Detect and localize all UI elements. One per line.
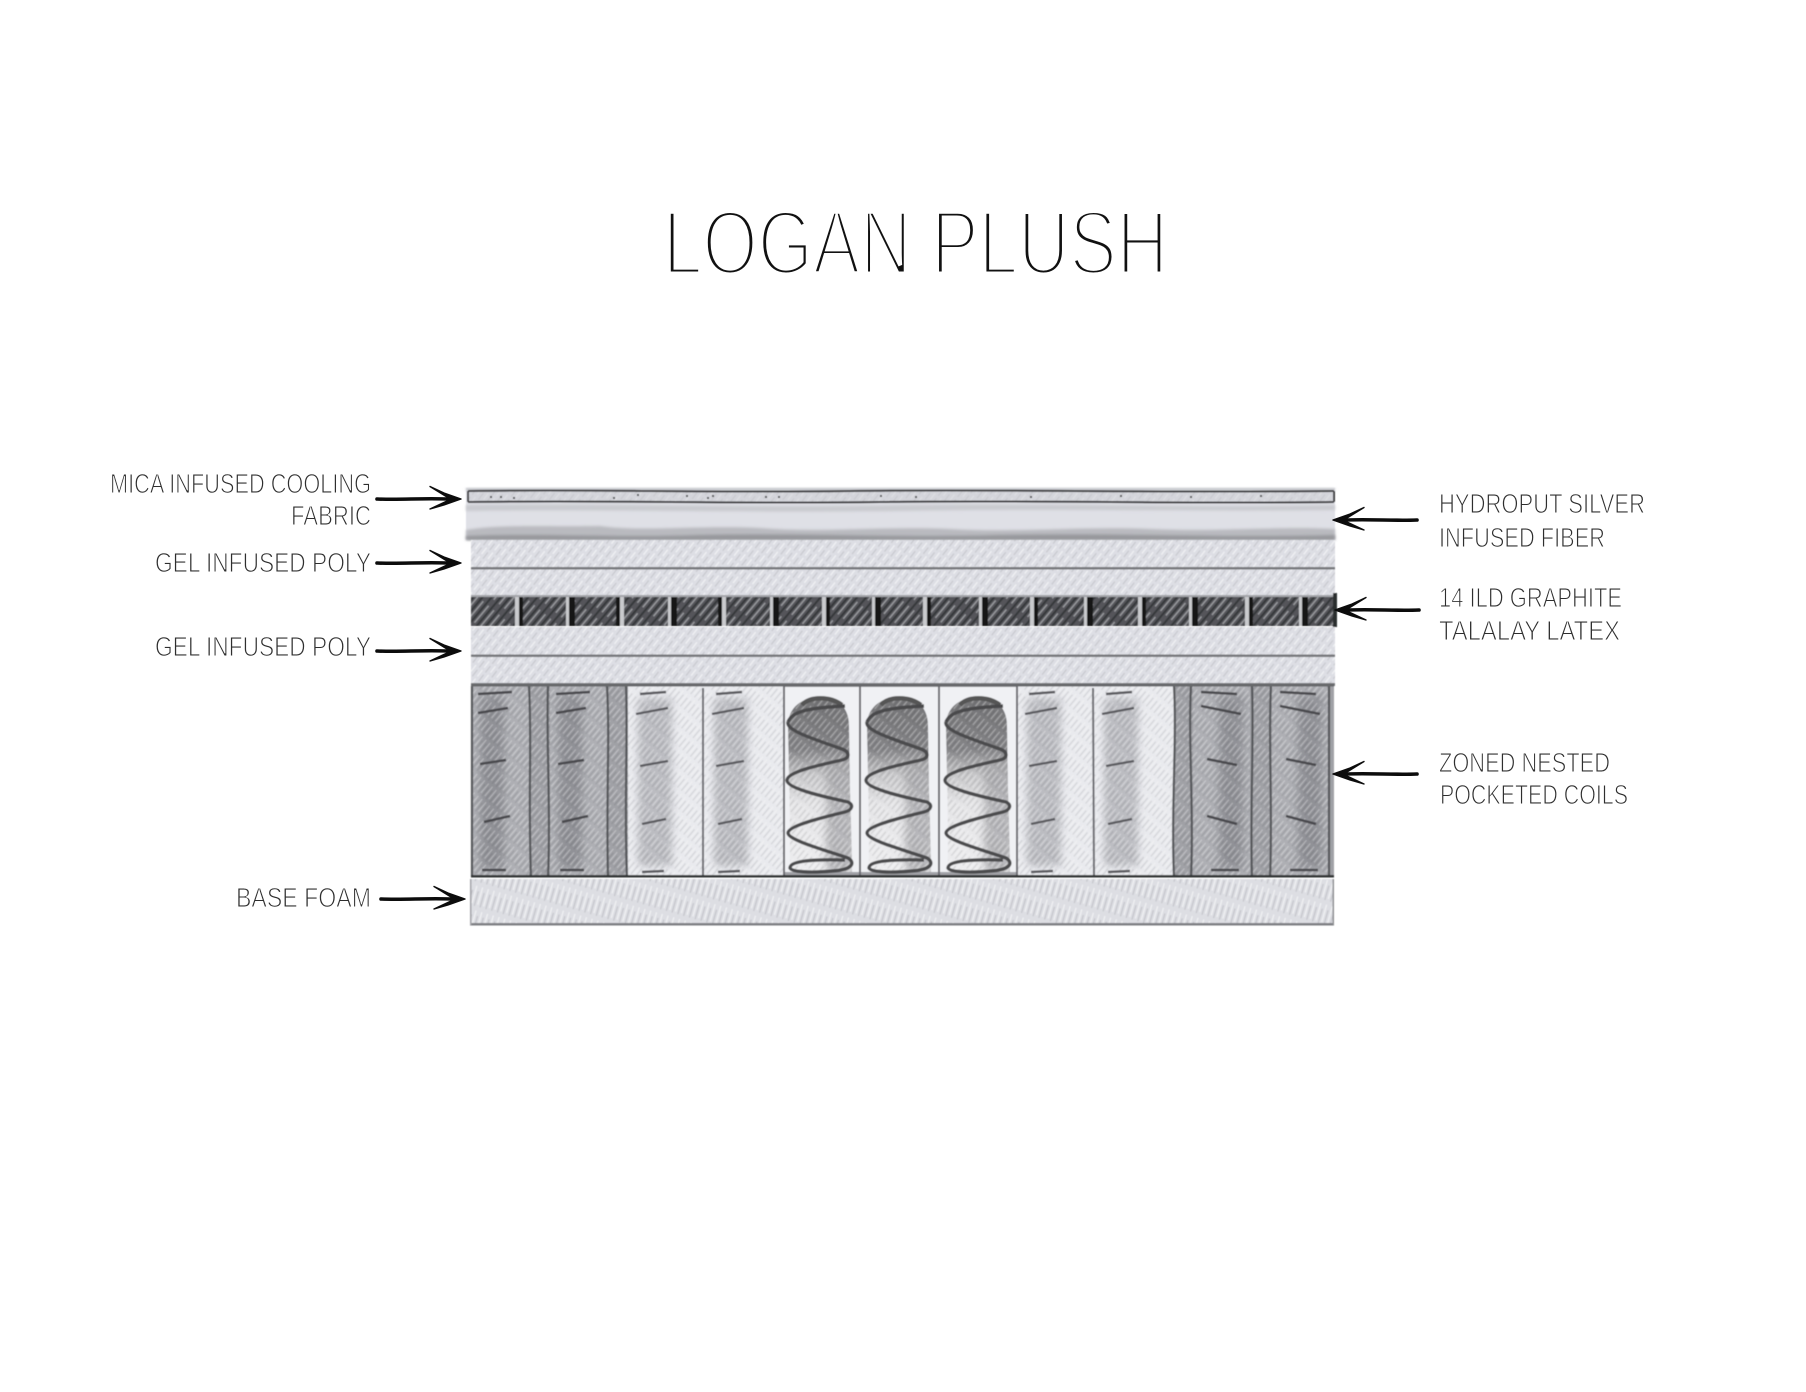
layer: gel infused poly foam pair upper (471, 540, 1335, 597)
callout: mica infused cooling fabric: MICA INFUSED COOLING (110, 468, 371, 499)
callout: hydroput silver infused fiber (1333, 488, 1645, 553)
gutter hatching: firm zones (528, 686, 1272, 877)
spring coil 1 (780, 687, 863, 875)
layer: zoned nested pocketed coils (471, 684, 1334, 878)
callout: 14 ILD graphite talalay latex: TALALAY LATEX (1439, 615, 1620, 646)
layer: gel infused poly foam pair lower (471, 627, 1335, 686)
spring coil 2 (859, 687, 942, 875)
coil: medium right 1 (1017, 686, 1097, 877)
callout: hydroput silver infused fiber: HYDROPUT SILVER (1439, 488, 1645, 519)
coil: medium left 2 (704, 686, 784, 877)
coil: firm right 1 (1193, 686, 1250, 877)
callout: mica infused cooling fabric (110, 468, 461, 531)
coil: firm right 2 (1272, 686, 1329, 877)
callout: 14 ILD graphite talalay latex (1335, 582, 1622, 646)
mattress cross-section (466, 488, 1337, 926)
callout: zoned nested pocketed coils: ZONED NESTED (1439, 747, 1610, 778)
callout: base foam: BASE FOAM (236, 882, 371, 913)
callout: zoned nested pocketed coils (1333, 747, 1628, 810)
callout: 14 ILD graphite talalay latex: 14 ILD GRAPHITE (1439, 582, 1622, 613)
callout: gel infused poly lower: GEL INFUSED POLY (155, 631, 371, 662)
callout: gel infused poly upper: GEL INFUSED POLY (155, 547, 371, 578)
coil: firm left 2 (550, 686, 607, 877)
callout: mica infused cooling fabric: FABRIC (291, 500, 371, 531)
layer: 14 ILD graphite talalay latex (471, 593, 1337, 627)
coil: medium left 1 (628, 686, 708, 877)
callout: zoned nested pocketed coils: POCKETED COILS (1440, 779, 1628, 810)
coil: medium right 2 (1094, 686, 1174, 877)
spring coil 3 (938, 687, 1021, 875)
layer: hydroput silver infused fiber (466, 488, 1335, 540)
layer: mica infused cooling fabric (466, 488, 1335, 503)
layer: base foam (470, 879, 1334, 926)
coil: firm left 1 (472, 686, 529, 877)
title: LOGAN PLUSH (663, 193, 1168, 294)
callout: hydroput silver infused fiber: INFUSED FIBER (1439, 522, 1605, 553)
